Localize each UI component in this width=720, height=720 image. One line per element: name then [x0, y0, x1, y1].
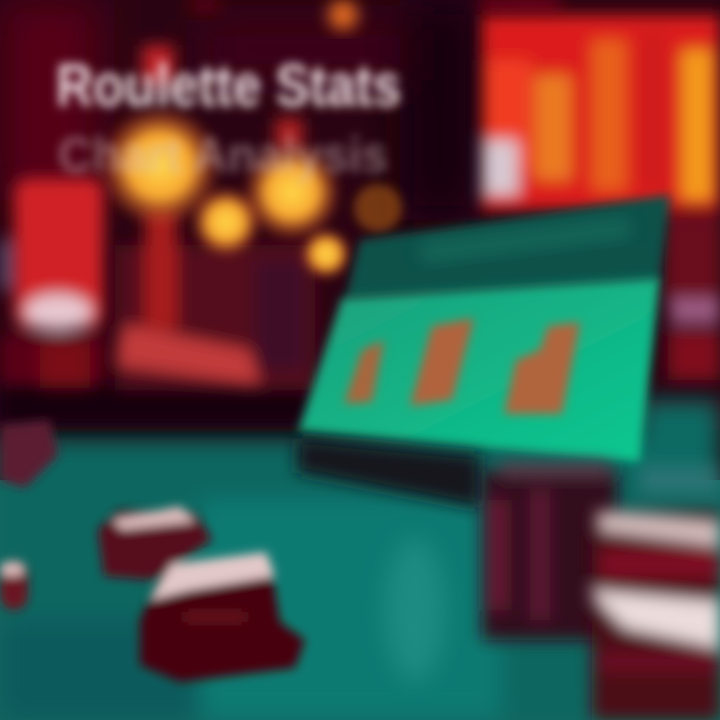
- chips: small left stack: [0, 420, 58, 610]
- ceiling lights: [190, 0, 560, 30]
- sign: red and orange striped panel: [482, 15, 720, 380]
- wall shading: [0, 0, 480, 220]
- chart panel: tilted green board: [296, 195, 670, 508]
- chips: central stacks on table: [98, 506, 305, 682]
- headline: blurred subtitle text: Chart Analysis: [58, 127, 388, 183]
- panel face: bright green screen: [298, 278, 660, 462]
- glowing lamps: [98, 104, 402, 280]
- chips: far right stack with white bands: [588, 465, 720, 720]
- panel base: dark underside: [296, 438, 480, 508]
- background: dark maroon wall: [0, 0, 720, 430]
- panel header: dark green strip: [345, 195, 670, 300]
- bar group 2: [410, 318, 474, 406]
- chips: tall right stack: [482, 462, 617, 640]
- background: teal table surface: [0, 400, 720, 720]
- bar group 1: [344, 340, 384, 404]
- background: teal table base: [0, 480, 720, 720]
- left red chair: [0, 178, 105, 388]
- table light reflection: [385, 538, 445, 682]
- headline: blurred title text: Roulette Stats: [56, 52, 401, 119]
- floor shadow band: [0, 378, 310, 426]
- center seating and lamp stand: [115, 45, 315, 390]
- header text strip: [420, 217, 631, 264]
- bar group 3: [504, 322, 580, 414]
